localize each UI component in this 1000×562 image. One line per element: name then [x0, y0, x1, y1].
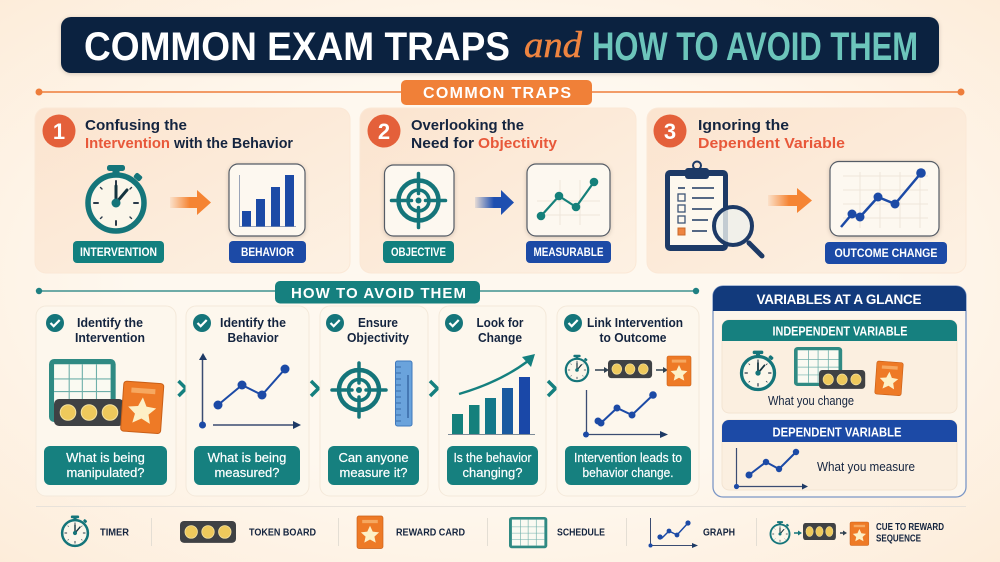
question box: Can anyone — [338, 450, 409, 465]
number badge 2 — [368, 114, 400, 148]
panel: step 1 — [36, 306, 176, 496]
number badge 1: 1 — [53, 119, 65, 144]
title: COMMON EXAM TRAPS — [84, 25, 510, 69]
check icon — [564, 314, 582, 332]
trap 1 heading: Intervention — [85, 135, 170, 152]
panel: trap 3 — [647, 108, 966, 273]
question box: What is being — [208, 450, 286, 465]
question box: changing? — [462, 465, 522, 480]
legend: cue to reward sequence — [770, 521, 944, 546]
legend: timer: TIMER — [100, 526, 129, 538]
objective target card — [384, 165, 454, 236]
panel: variables at a glance: VARIABLES AT A GLANCE — [756, 292, 922, 307]
arrow — [170, 190, 211, 215]
label: measurable — [526, 241, 611, 263]
trap 2 heading: Overlooking the — [411, 117, 524, 134]
legend: schedule: SCHEDULE — [557, 526, 605, 538]
panel: trap 2 — [360, 108, 636, 273]
legend: timer — [62, 516, 129, 546]
legend: reward card — [357, 516, 465, 548]
line graph — [583, 390, 668, 438]
step 1 heading: Intervention — [75, 331, 145, 345]
statement box: Intervention leads to — [574, 450, 682, 465]
dependent variable box — [722, 420, 957, 490]
heading: how to avoid them — [36, 281, 699, 304]
label: intervention: INTERVENTION — [80, 247, 157, 259]
arrow: chevron — [178, 381, 186, 396]
trap 2 heading: Objectivity — [478, 135, 558, 152]
number badge 1 — [42, 114, 76, 148]
panel: variables at a glance — [713, 286, 966, 497]
heading: how to avoid them: HOW TO AVOID THEM — [291, 285, 466, 302]
number badge 3 — [654, 114, 686, 148]
step 4 heading: Change — [478, 331, 522, 345]
independent variable box — [722, 320, 957, 413]
panel: trap 1 — [35, 108, 350, 273]
icon: timer — [88, 165, 144, 231]
question box: manipulated? — [66, 465, 145, 480]
number badge 3: 3 — [664, 119, 676, 144]
panel: step 4 — [439, 306, 546, 496]
step 3 heading: Objectivity — [347, 331, 409, 345]
heading: common traps: COMMON TRAPS — [423, 85, 571, 102]
independent variable box: INDEPENDENT VARIABLE — [772, 324, 908, 338]
question box: measure it? — [340, 465, 407, 480]
check icon — [326, 314, 344, 332]
label: outcome change — [825, 242, 947, 264]
measurable graph card — [527, 164, 610, 236]
outcome graph card — [830, 162, 939, 236]
trap 1 heading: with the Behavior — [173, 135, 293, 152]
step 2 heading: Identify the — [220, 316, 286, 330]
step 3 heading: Ensure — [358, 316, 398, 330]
icon: target — [332, 363, 386, 417]
question box: What is being — [66, 450, 145, 465]
label: objective — [383, 241, 454, 263]
legend: token board: TOKEN BOARD — [249, 526, 316, 538]
icon: clipboard with magnifier — [665, 162, 762, 256]
arrow — [768, 188, 812, 213]
trap 2 heading: Need for — [411, 135, 474, 152]
arrow: chevron — [311, 381, 318, 396]
legend: schedule — [509, 517, 605, 548]
title — [61, 17, 939, 73]
question box: measured? — [214, 465, 280, 480]
legend: token board — [180, 521, 316, 543]
behavior bar chart card — [229, 164, 305, 236]
panel: step 2 — [186, 306, 309, 496]
dependent variable box: What you measure — [817, 460, 915, 474]
legend: cue to reward sequence: SEQUENCE — [876, 534, 921, 544]
label: intervention — [73, 241, 164, 263]
check icon — [193, 314, 211, 332]
label: behavior — [229, 241, 306, 263]
legend: cue to reward sequence: CUE TO REWARD — [876, 522, 944, 533]
panel: step 3 — [320, 306, 428, 496]
step 5 heading: to Outcome — [600, 331, 667, 345]
label: outcome change: OUTCOME CHANGE — [834, 248, 938, 260]
question box — [44, 446, 167, 485]
arrow — [475, 190, 514, 215]
step 2 heading: Behavior — [228, 331, 279, 345]
statement box: behavior change. — [582, 465, 674, 480]
question box — [447, 446, 538, 485]
legend: graph: GRAPH — [703, 526, 735, 538]
step 1 heading: Identify the — [77, 316, 143, 330]
rising bar chart — [448, 354, 535, 434]
arrow: chevron — [430, 381, 438, 396]
step 4 heading: Look for — [476, 316, 524, 330]
label: objective: OBJECTIVE — [391, 247, 446, 259]
title: and — [524, 25, 583, 66]
dependent variable box: DEPENDENT VARIABLE — [772, 426, 902, 440]
label: behavior: BEHAVIOR — [241, 247, 295, 259]
legend: reward card: REWARD CARD — [396, 526, 465, 538]
number badge 2: 2 — [378, 119, 390, 144]
cue to reward sequence — [566, 355, 691, 386]
check icon — [445, 314, 463, 332]
label: measurable: MEASURABLE — [534, 247, 604, 259]
trap 1 heading: Confusing the — [85, 117, 187, 134]
question box — [194, 446, 300, 485]
heading: common traps — [36, 80, 964, 105]
panel: step 5 — [557, 306, 699, 496]
arrow: chevron — [548, 381, 556, 396]
icon: ruler — [396, 361, 412, 426]
step 5 heading: Link Intervention — [587, 316, 683, 330]
legend: graph — [648, 518, 735, 548]
statement box — [565, 446, 691, 485]
trap 3 heading: Dependent Variable — [698, 135, 845, 152]
question box — [328, 446, 419, 485]
check icon — [46, 314, 64, 332]
line graph — [199, 353, 301, 429]
independent variable box: What you change — [768, 394, 854, 408]
trap 3 heading: Ignoring the — [698, 117, 789, 134]
icon: schedule, token board, reward card — [49, 359, 164, 434]
question box: Is the behavior — [454, 450, 532, 465]
